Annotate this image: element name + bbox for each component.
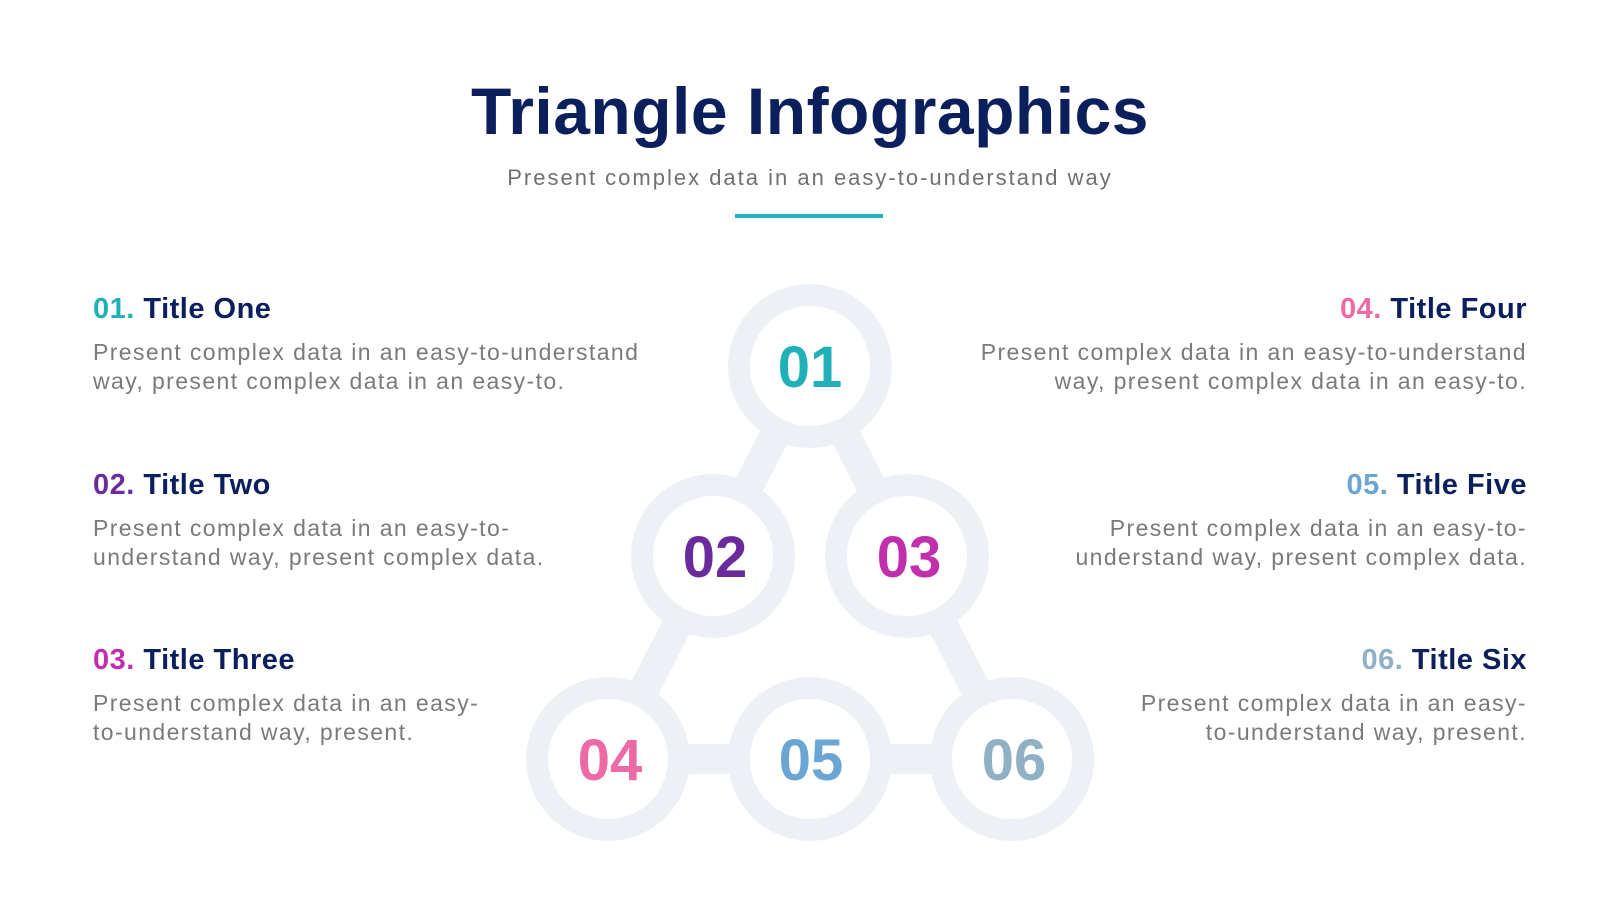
subtitle: Present complex data in an easy-to-understand way	[507, 165, 1113, 190]
item 06	[1141, 644, 1527, 745]
item 02: Present complex data in an easy-to-	[93, 515, 510, 541]
item 02	[93, 469, 545, 570]
item 03: 03. Title Three	[93, 644, 295, 676]
item 03: to-understand way, present.	[93, 719, 414, 745]
item 06: to-understand way, present.	[1206, 719, 1527, 745]
item 06: Present complex data in an easy-	[1141, 690, 1527, 716]
item 01: Present complex data in an easy-to-understand	[93, 339, 639, 365]
item 05: 05. Title Five	[1346, 469, 1527, 501]
item 05: understand way, present complex data.	[1075, 544, 1527, 570]
item 04: 04. Title Four	[1340, 293, 1527, 325]
item 04: way, present complex data in an easy-to.	[1055, 368, 1527, 394]
accent underline	[735, 214, 883, 218]
item 01: way, present complex data in an easy-to.	[93, 368, 565, 394]
item 03: Present complex data in an easy-	[93, 690, 479, 716]
item 02: 02. Title Two	[93, 469, 271, 501]
number 05: 05	[779, 728, 843, 793]
number 03: 03	[877, 525, 941, 590]
item 01	[93, 293, 639, 394]
item 05: Present complex data in an easy-to-	[1110, 515, 1527, 541]
number 04: 04	[578, 728, 642, 793]
item 01: 01. Title One	[93, 293, 271, 325]
title: Triangle Infographics	[471, 74, 1149, 148]
item 06: 06. Title Six	[1361, 644, 1527, 676]
item 03	[93, 644, 479, 745]
item 02: understand way, present complex data.	[93, 544, 545, 570]
number 02: 02	[683, 525, 747, 590]
item 04	[981, 293, 1527, 394]
number 06: 06	[982, 728, 1046, 793]
number 01: 01	[778, 335, 842, 400]
item 05	[1075, 469, 1527, 570]
item 04: Present complex data in an easy-to-understand	[981, 339, 1527, 365]
